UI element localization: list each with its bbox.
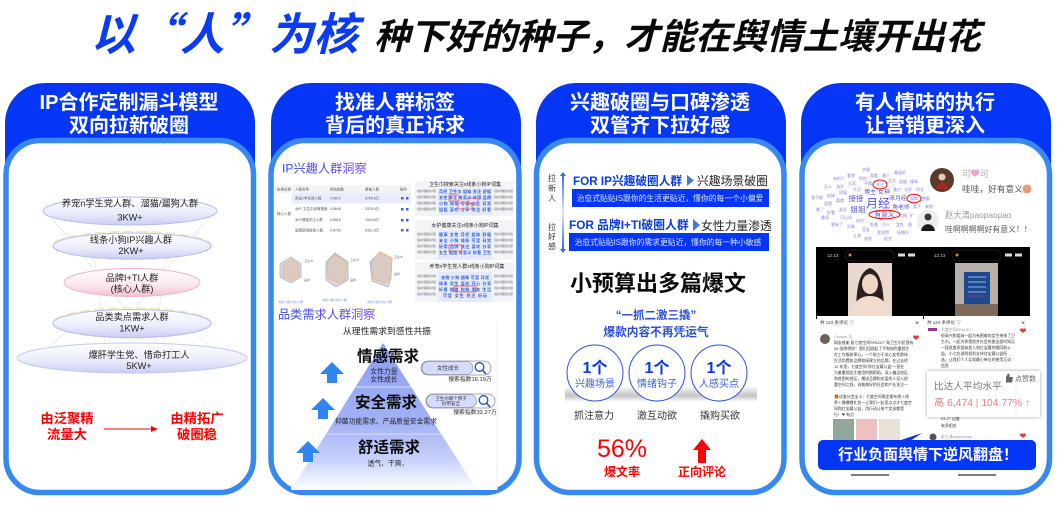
radar charts [278,252,403,304]
search pill: safety: 卫生巾哪个牌子 [435,395,467,402]
word clouds: 相关内容相关内容 [494,194,513,199]
circle captions: 激互动欲 [637,409,677,422]
word clouds: 月经 卫生巾 姐妹 关注 舒服 [439,188,491,194]
radar charts: 品牌 [394,271,400,276]
word clouds: 相关内容相关内容 [417,249,436,254]
word clouds: 相关内容相关内容 [494,273,513,278]
comment card: left: 12 年里，七度空间“你红宝藏公益”一直在 [834,364,904,369]
comment card: left: 和贫困的地区，赠送品牌和关爱的人深入经 [834,376,908,381]
comment card: left: 网友感谢 姐七度空间SPACE7 致卫生巾民营有 [834,340,914,345]
word cloud: 有意义 [874,210,895,218]
radar charts: 浏览人群 对比人群 [322,297,347,302]
strategy row: brand [569,218,772,251]
data table: 3376.6万 [365,207,380,211]
demand pyramid: 情感需求 [357,346,419,366]
radar charts: 浏览人群 对比人群 [367,299,392,304]
data table: 1849.8万 [365,218,380,222]
word clouds: 相关内容相关内容 [417,231,436,236]
word clouds: 女性 安全 有意义 好用 品牌 [439,194,491,200]
funnel chart: 1KW+ [119,324,145,334]
circle stats: 情绪钩子 [637,377,677,390]
comment card: right: 有多相关 [941,423,957,428]
panel header: execution: 让营销更深入 [865,114,985,137]
word clouds: 相关内容相关内容 [417,279,436,284]
word clouds: 可爱 女生 关注 好玩 [443,292,487,298]
word cloud: 姐姐 [899,178,907,184]
comment card: right: 选，让我们个人实现最小单位的使用互动 [941,357,1011,362]
panel: interest and word of mouth [536,83,786,492]
callout: from broad to precise: 由泛聚精 [40,410,94,426]
word cloud: 好看 [827,209,835,215]
comment card: left: 重空间之线，说着美好的社会和产业关注一 [834,382,908,387]
word cloud [811,166,933,241]
circle stats: 人感买点 [699,377,739,390]
word clouds: 安全 小狗 线条 可爱 日常 [439,237,491,243]
heading: IP interest insight: IP兴趣人群洞察 [282,160,367,176]
word clouds [415,181,514,302]
comment card: left: 共 124 条评论 ▽ [820,319,854,326]
word cloud: 女神 [878,188,890,196]
comment: user one: 哇哇，好有意义 [962,183,1023,194]
card frame: tags [271,140,519,492]
word cloud: 女性 [896,221,904,227]
word clouds: 相关内容相关内容 [494,243,513,248]
word cloud: 女子 [913,203,921,209]
data table: 覆盖人群 [365,186,379,192]
word clouds: 相关内容相关内容 [417,285,436,290]
data table: 操作 [400,186,408,192]
word cloud: 我看 [870,172,878,178]
funnel chart: 品牌I+TI人群 [106,272,158,283]
search pill: safety: 好用安全 [442,400,460,407]
word cloud: 容就 [824,200,832,206]
word clouds: 相关内容相关内容 [417,237,436,242]
comment card: right: 七度空间SPACE7 [941,327,972,332]
word cloud: 姐妹 [827,192,835,198]
panel header: tags: 背后的真正诉求 [325,113,465,137]
data table: 感情使用轻松人群 [295,228,323,232]
data table: 私域分类 [277,186,291,192]
comment card: left: 为着重视女生使用的期帮助。深入偏远地区 [834,370,908,375]
comment card: right [924,316,1030,442]
circle stats: 1个 [707,359,731,377]
photo: presenter [848,263,892,317]
data table: 0.8673 [330,196,341,200]
word clouds: 相关内容相关内容 [494,237,513,242]
comment card: right: 生巾。一起为你我他并社会的更这部时知压 [941,339,1015,344]
circle captions: 抓注意力 [574,409,614,422]
comment card: left: 生活用费和品牌和绿建立的品牌。在过去的 [834,358,908,363]
stat: 56 percent [597,435,647,479]
word clouds: 相关内容相关内容 [417,188,436,193]
phone screenshots: 12:13 [934,253,946,258]
phone screenshots: 12:13 [827,253,839,258]
word clouds: 相关内容相关内容 [417,243,436,248]
word cloud: 衣服 [862,166,870,172]
arrow: positive comments: 正向评论 [678,464,726,479]
comment card: right: 一段进度多姐妹加入和红宝藏的随同助公 [941,345,1011,350]
word clouds: 女生 姐姐 有意义 好看 卫生 [439,249,491,255]
strategy row: IP interest: 兴趣场景破圈 [697,174,768,188]
demand pyramid: 抑菌功能需求、产品质量安全需求 [335,416,437,426]
word clouds: 女护健康关注x线条小狗IP词集 [431,222,499,229]
comment: user one: 可 [962,169,971,179]
circle stats: 1个 [583,359,607,377]
word cloud: 太精 [899,212,907,218]
comment card: left: 50 强榜榜样！我们回顾起了平和绿色重视生 [834,346,910,351]
word cloud: 拓搏丹 [897,229,909,235]
funnel chart: 线条小狗IP兴趣人群 [90,234,172,245]
data table: 6361.8万 [365,228,380,232]
word cloud: 接接 [848,193,864,203]
comment card: right: 很高兴和姐妹一起为有困难的女生带来了卫 [941,333,1015,338]
radar charts: 品牌 [350,277,356,282]
strategy row: brand: 女性力量渗透 [701,219,772,233]
word cloud: 有的人 [833,175,845,181]
subheading: one catch two spur three pry: 爆款内容不再凭运气 [603,325,709,339]
word cloud: 更新了 [831,221,843,227]
word cloud: 美了 [816,206,824,212]
comment: user two: 哇啊啊啊啊好有意义！！ [945,224,1032,234]
axis labels: pull new and pull favor: 好 [548,231,556,241]
word cloud: 周期 [910,195,918,201]
comment: user two: 赵大清paopaopao [945,210,1012,220]
word cloud: 无人 [824,184,832,189]
radar charts: 卫生巾 [350,257,359,262]
heading: category demand insight: 品类需求人群洞察 [278,308,376,322]
funnel chart: (核心人群) [111,283,153,294]
funnel chart: 2KW+ [118,246,144,256]
data table: 预估指数 [330,186,344,192]
word cloud: 图 [908,221,912,227]
search pill: emotional: 搜索指数16.19万 [448,375,492,383]
word cloud: 友好 [839,206,847,212]
comment card: left: ✕ [915,320,919,326]
word cloud: 不懂 [864,180,872,186]
demand pyramid: 安全需求 [355,392,417,412]
word clouds: 线条 学生 喜欢 开心 分享 [439,280,491,286]
radar charts: 卫生巾 [304,258,313,263]
word cloud: 大家 [848,180,856,186]
word cloud: 扩 [910,212,914,218]
data table: 0.8726 [330,228,341,232]
heading: hit articles: 小预算出多篇爆文 [570,271,746,296]
demand pyramid: 舒适需求 [358,438,420,456]
demand pyramid: 女性力量 [370,366,398,376]
stat box: above average: 比达人平均水平 [934,380,1002,392]
card frame: execution [802,140,1050,492]
circle stats: 兴趣场景 [575,377,615,390]
axis labels: pull new and pull favor: 感 [548,241,556,251]
word cloud: 时长 [916,186,924,192]
comment card: left [817,316,923,442]
phone screenshots [816,247,1030,319]
demand pyramid [291,322,497,490]
word cloud: 来月经 [889,194,907,202]
word cloud: 激对 [893,186,901,192]
word cloud: 油学 [836,183,844,189]
radar charts: 品牌 [304,277,310,282]
word clouds: 相关内容相关内容 [494,231,513,236]
stat: 56 percent: 爆文率 [604,464,640,479]
comment: user one: 可 [980,169,989,179]
data table: 5765.8万 [365,196,380,200]
word clouds: 相关内容相关内容 [494,249,513,254]
funnel chart: 3KW+ [117,212,143,222]
panel header: funnel: IP合作定制漏斗模型 [40,90,218,114]
strategy row: brand: FOR 品牌I+TI破圈人群 [569,218,689,232]
word cloud: 美丽的 [894,169,906,175]
word cloud: 古人 [882,221,890,227]
panel: audience tags [271,83,521,492]
callout: from broad to precise [40,410,224,442]
stat box: above average: 高 6,474 | 104.77% ↑ [934,396,1030,409]
comment card: left: 在工作服装率心。一个致力于关心女性群体 [834,352,908,357]
panel header: tags: 找准人群标签 [335,91,455,114]
word clouds: 宠物 小狗 猫咪 可爱 日常 [441,274,489,280]
subheading: one catch two spur three pry [603,308,709,339]
word cloud: 喜就 [836,197,844,203]
comment card: left: 界＋赠赠赠礼包一让我们一起用点点才七度空 [834,400,912,405]
strategy row: IP interest: FOR IP兴趣破圈人群 [573,174,682,188]
comment card: left: 行！❤ 有点 [834,412,854,417]
word cloud: 棒棒 [910,178,918,184]
arrow: double direction [560,172,566,253]
word cloud: 感解 [922,195,930,201]
stat box: above average [927,371,1040,417]
panel header: interest [536,83,786,175]
data table [275,185,411,232]
stat box: above average: 点赞数 [1015,374,1036,383]
card frame: interest [536,140,784,492]
word cloud: 波哈 [864,235,872,241]
circle stats: 1个 [645,359,669,377]
funnel chart: 爆肝学生党、惜命打工人 [88,349,190,360]
panel: human execution [801,83,1051,492]
data table: 核心人群 [277,211,291,216]
word cloud: 太好 [904,186,912,192]
word clouds: 相关内容相关内容 [494,206,513,211]
demand pyramid: 从理性需求到感性共振 [343,325,431,336]
banner: turnaround [818,433,1036,470]
data table: 0.8648 [330,207,341,211]
word cloud: 博主 [864,188,876,196]
arrows: pyramid levels [296,362,344,462]
word cloud: 不活 [853,186,861,192]
comment: user two [917,210,1032,234]
panel header: interest: 兴趣破圈与口碑渗透 [570,90,750,114]
word cloud: 最个 [882,172,890,178]
panel header: execution: 有人情味的执行 [855,91,995,114]
word cloud: 月经 [866,196,890,210]
word cloud: 吃着 [870,221,878,227]
circle captions: 撬购买欲 [700,409,740,422]
word cloud: 太太 [888,177,896,183]
funnel chart: 5KW+ [126,361,152,371]
axis labels: pull new and pull favor: 人 [548,194,556,203]
word clouds: 好用 品牌 关注 喜欢 分享 [439,243,491,249]
search pill: safety: 搜索指数32.27万 [453,408,497,416]
comment card: left: 间和红宝藏公益，用行动让每个女孩都是 [834,406,904,411]
word cloud: 形象 [847,223,855,229]
radar charts: 浏览人群 对比人群 [278,299,303,304]
comment card: left: 🎁试查分型宝卡：七度空间周定案布袋＋线 [834,394,909,399]
word clouds: 相关内容相关内容 [494,285,513,290]
photo: notice board [955,263,998,317]
word clouds: 相关内容相关内容 [494,291,513,296]
title: 种下好的种子，才能在舆情土壤开出花 [374,9,986,60]
word clouds: 姐姐 喜欢 分享 关注 好看 [439,206,491,212]
search pill: emotional [421,361,492,383]
axis labels: pull new and pull favor: 新 [548,183,556,193]
word clouds: 相关内容相关内容 [417,194,436,199]
subheading: one catch two spur three pry: “一抓二激三撬” [616,308,696,322]
data table: 女IP-卫生巾品牌搜索 [295,206,328,211]
word clouds: 卫生巾搜索关注x线条小狗IP词集 [429,181,501,188]
comment card: left: Camille-号 [834,334,852,339]
panel header: tags [271,83,521,175]
card frame: funnel [6,140,254,492]
word clouds: 小狗 线条 可爱 女生 日常 [439,200,491,206]
panel: IP funnel model [5,83,255,492]
search pill: safety [426,394,497,416]
strategy row: IP interest: 治愈式贴贴IS跟你的生活更贴近，懂你的每一个小偏爱 [577,193,764,203]
word clouds: 健康 女性 月经 姐妹 舒服 [439,231,491,237]
word cloud: 看想 [847,172,855,178]
word cloud: 我觉得 [877,229,889,235]
word cloud: 室友 [862,226,870,232]
callout: from broad to precise: 由精拓广 [170,410,224,426]
search pill: emotional: 女性成长 [437,364,459,372]
word clouds: 相关内容相关内容 [494,200,513,205]
arrow: positive comments [678,439,726,479]
panel header: funnel [5,83,255,175]
word cloud: 可以问 [840,214,852,220]
panel header: execution [801,83,1051,175]
word clouds: 相关内容相关内容 [417,206,436,211]
word cloud: 我不能 [811,194,823,200]
comment card: right: 益。小七应说明很利支持红宝藏公益所 [941,351,1007,356]
circle captions [574,409,740,422]
word cloud: 把的 [859,175,867,181]
axis labels: pull new and pull favor: 拉 [548,222,556,232]
comment: user one [930,168,1032,194]
word clouds: 好看 猫猫 狗狗 朋友 生活 [439,286,491,292]
data table: 0.8516 [330,218,341,222]
demand pyramid: 女性成长 [370,374,398,384]
data table: 人群名称 [295,186,309,192]
word clouds: 相关内容相关内容 [417,291,436,296]
callout: from broad to precise: 流量大 [47,426,87,442]
word clouds: 相关内容相关内容 [494,188,513,193]
word clouds: 相关内容相关内容 [494,279,513,284]
word cloud: 配合 [884,235,892,241]
word cloud: 姐姐 [850,204,866,214]
banner: turnaround: 行业负面舆情下逆风翻盘！ [838,446,1018,464]
word cloud: 来接 [925,203,933,209]
axis labels: pull new and pull favor: 拉 [548,173,556,183]
word clouds: 相关内容相关内容 [417,273,436,278]
word cloud: 关注 [876,181,884,187]
axis labels: pull new and pull favor [548,173,556,251]
title [91,0,986,63]
word cloud: 创作 [856,217,864,223]
word cloud: 让我 [853,232,861,238]
strategy row: IP interest [572,174,769,207]
strategy row: brand: 治愈式贴贴IS跟你的需求更贴近，懂你的每一种小敏感 [575,237,762,247]
stat: 56 percent: 56% [597,435,647,463]
panel header: funnel: 双向拉新破圈 [69,113,189,137]
word cloud: 美丽 [821,214,829,220]
comment card: right: ✕ [1021,320,1025,326]
funnel chart [17,197,247,373]
word clouds: 相关内容相关内容 [417,200,436,205]
callout: from broad to precise: 破圈稳 [177,426,217,442]
word cloud: 角老师 [892,203,910,211]
comment card: right: 03-27 回复 [941,416,960,421]
circle stats [565,345,757,402]
comment card: right: 信息 [941,363,949,368]
panel header: interest: 双管齐下拉好感 [590,113,730,137]
word clouds: 养宠n学生党人群x线条小狗IP词集 [429,263,505,270]
comment card: right: 赵大清paopaopao [941,434,972,439]
comment card: right: 共 124 条评论 ▽ [927,319,961,326]
funnel chart: 养宠n学生党人群、溜猫/遛狗人群 [62,198,198,208]
radar charts: 卫生巾 [394,254,403,259]
arrow: funnel direction [104,426,158,432]
word cloud: 回窗 [839,189,847,195]
data table: 女IP健康关注人群 [295,217,323,222]
funnel chart: 品类卖点需求人群 [95,311,169,322]
demand pyramid: 透气、干爽、 [368,458,408,468]
data table: 养宠n学生党人群 [295,196,322,200]
